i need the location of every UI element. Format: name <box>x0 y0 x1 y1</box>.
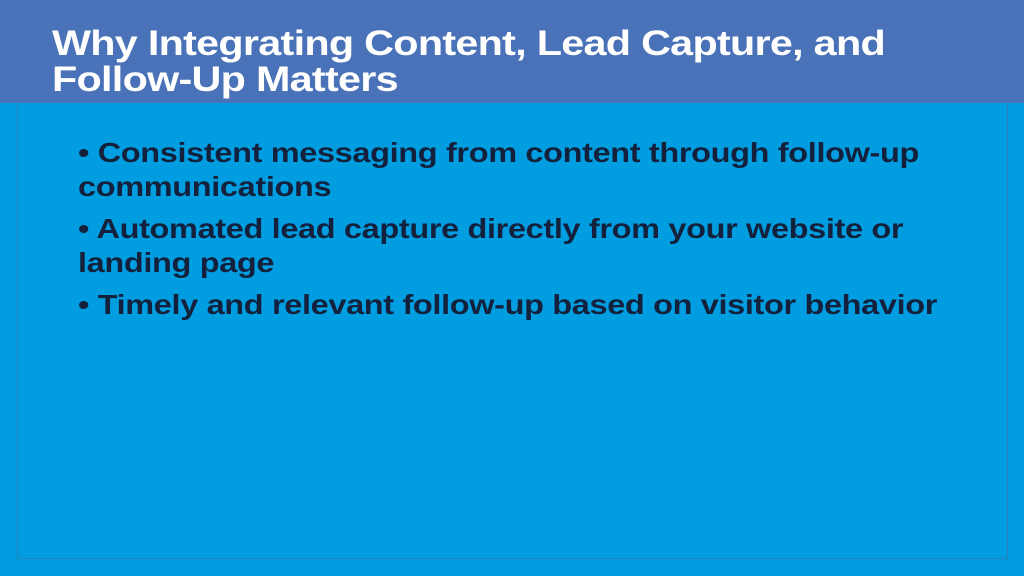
bullet list <box>78 137 937 320</box>
title: Why Integrating Content, Lead Capture, and <box>52 24 885 63</box>
bullet 1 <box>78 137 919 202</box>
bullet 2 <box>78 213 904 278</box>
bullet 3: • Timely and relevant follow-up based on visitor behavior <box>78 289 937 320</box>
header band <box>0 0 1024 103</box>
bullet 2: • Automated lead capture directly from your website or <box>78 213 903 244</box>
bullet 1: • Consistent messaging from content through follow-up <box>78 137 919 168</box>
title: Follow-Up Matters <box>52 60 398 99</box>
bullet 2: landing page <box>78 247 274 278</box>
content frame <box>17 103 1008 559</box>
bullet 1: communications <box>78 171 331 202</box>
title <box>52 24 885 99</box>
